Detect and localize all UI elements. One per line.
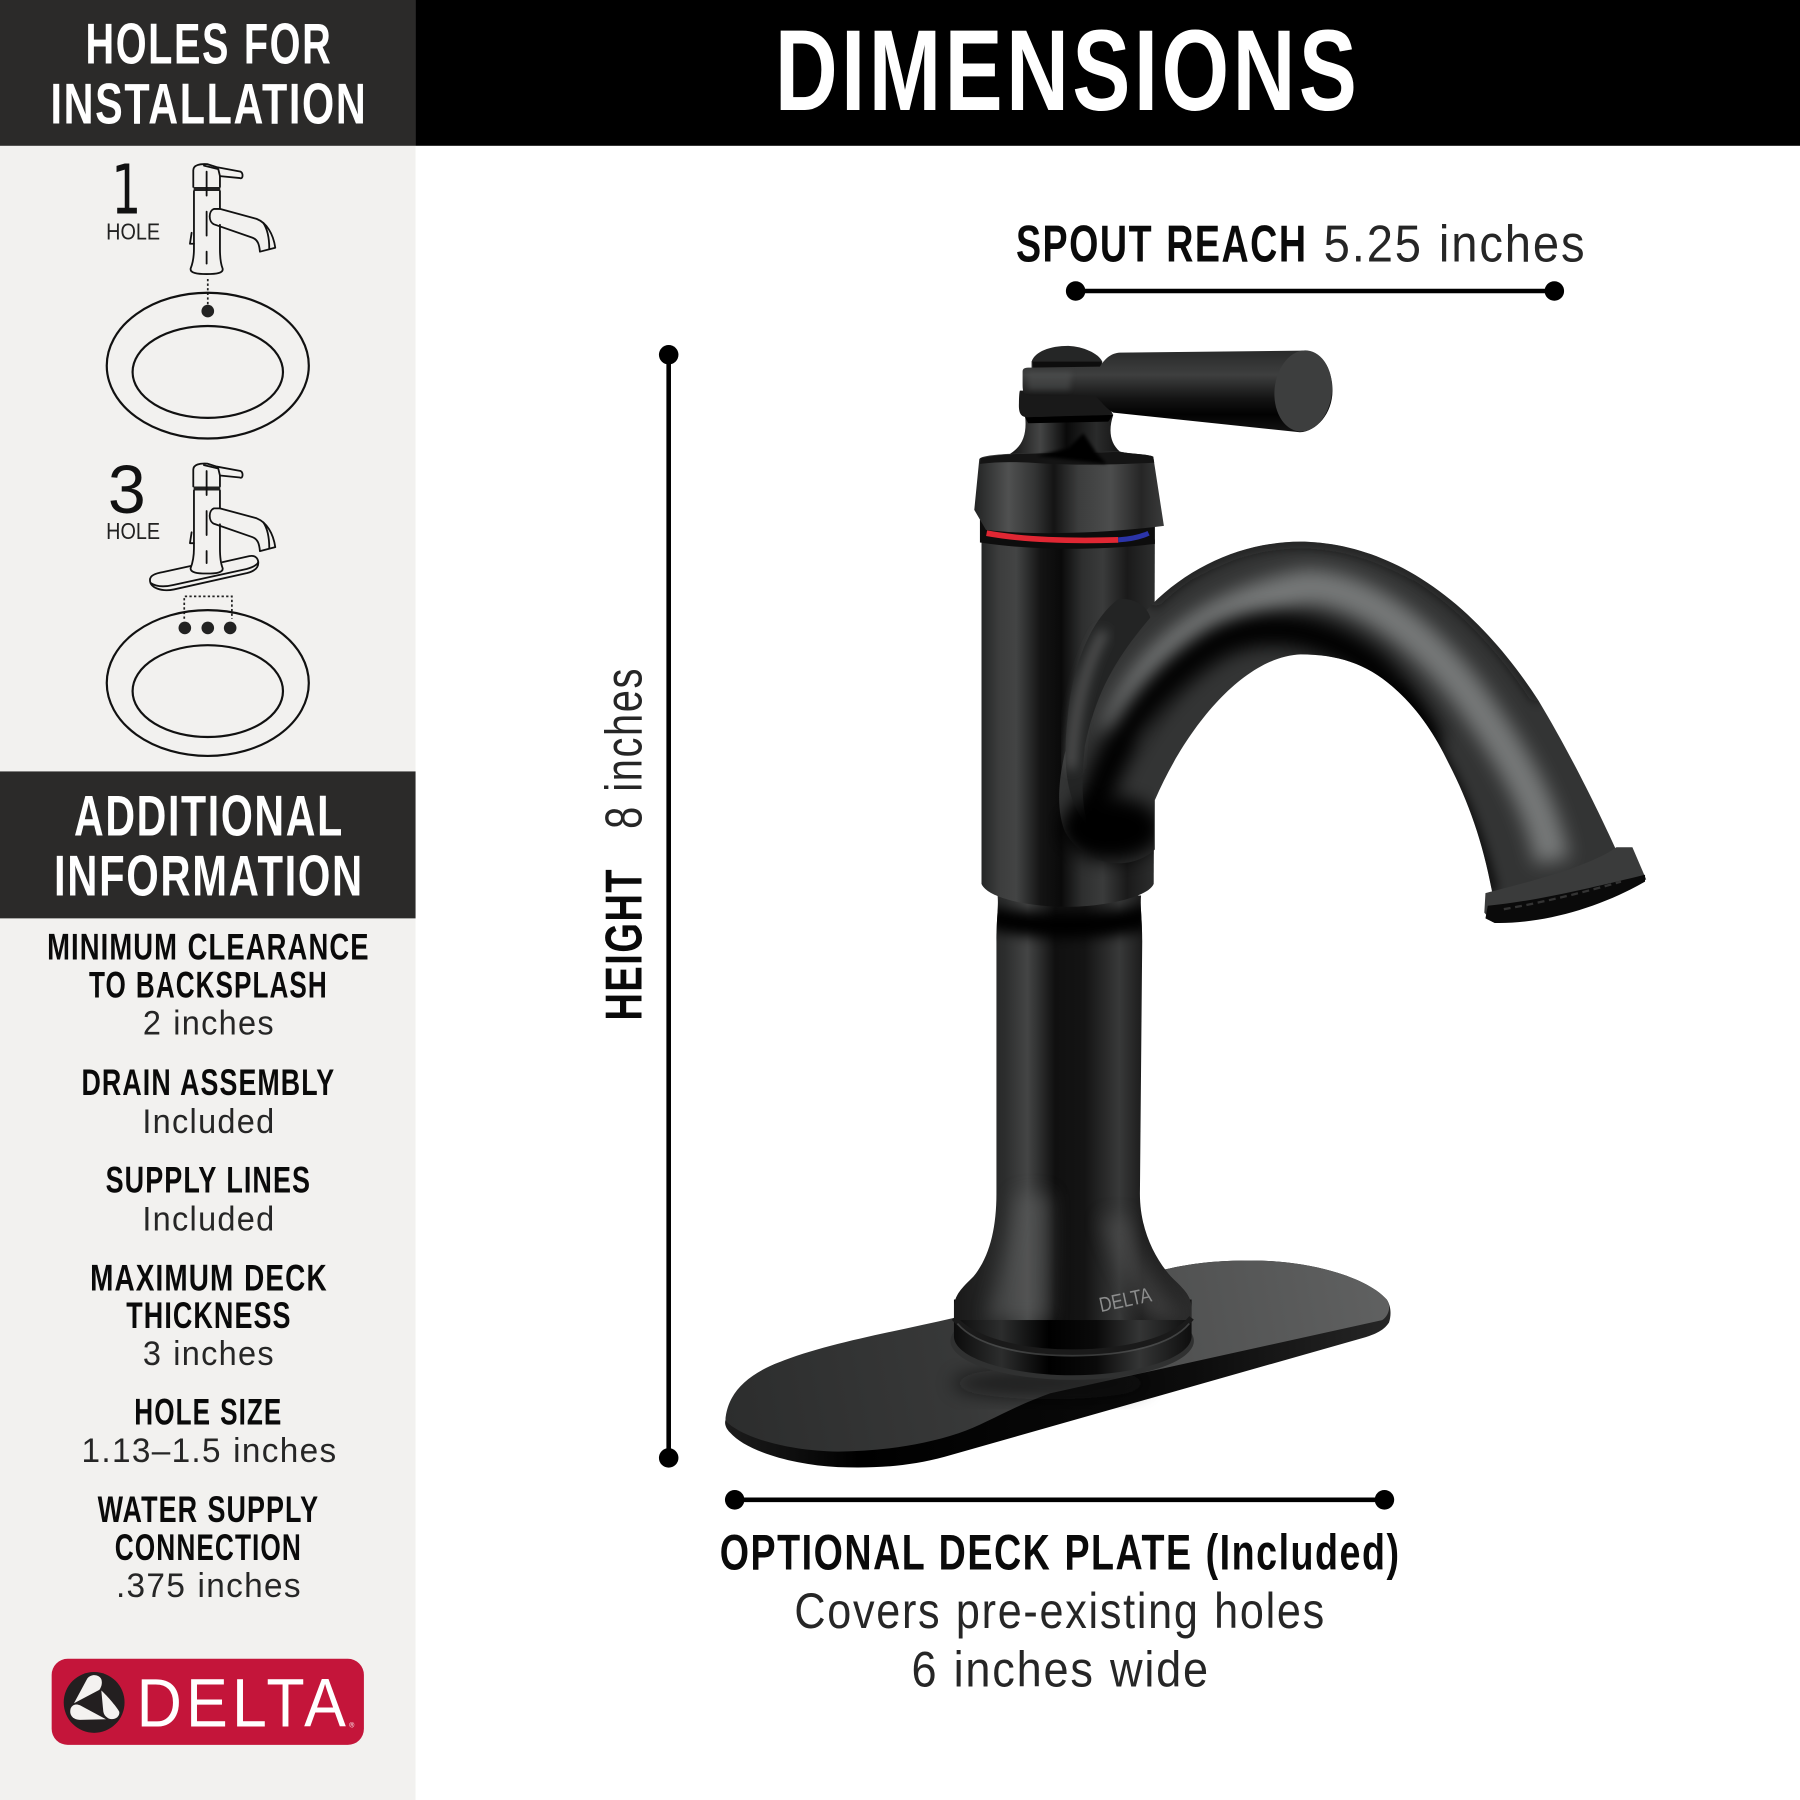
logo: Delta: DELTA xyxy=(137,1665,350,1742)
spec: supply lines: Included xyxy=(142,1201,276,1239)
dimension: height: 8 inches xyxy=(595,667,653,829)
label: 1 hole: HOLE xyxy=(106,218,160,244)
label: 3 hole xyxy=(106,451,160,544)
base ring xyxy=(951,1299,1194,1380)
neck xyxy=(982,415,1153,460)
spec: drain assembly: Included xyxy=(142,1103,276,1141)
handle assembly xyxy=(974,346,1336,549)
hot and cold ring xyxy=(987,533,1149,540)
valve cap xyxy=(974,452,1164,533)
dimension: optional deck plate: 6 inches wide xyxy=(911,1640,1210,1697)
spec: minimum clearance: 2 inches xyxy=(143,1004,275,1042)
spec: minimum clearance xyxy=(47,927,370,1042)
logo: Delta: ® xyxy=(349,1722,354,1730)
dotted bracket lines xyxy=(184,596,232,619)
dimension: height: HEIGHT xyxy=(595,868,653,1021)
lever xyxy=(1023,351,1333,432)
heading: holes for installation: INSTALLATION xyxy=(51,72,367,136)
spec: maximum deck thickness: MAXIMUM DECK xyxy=(90,1257,328,1298)
spout tip flange xyxy=(1484,847,1646,923)
label: 1 hole xyxy=(106,151,160,244)
logo: Delta xyxy=(52,1659,364,1745)
dimension: spout reach xyxy=(1016,215,1586,301)
icon: single-hole faucet xyxy=(190,164,275,274)
label: 3 hole: HOLE xyxy=(106,518,160,544)
spec: maximum deck thickness: 3 inches xyxy=(143,1335,275,1373)
spout root highlight xyxy=(1066,599,1150,827)
spec: maximum deck thickness: THICKNESS xyxy=(126,1295,292,1336)
spec: hole size xyxy=(82,1392,338,1470)
dimension: optional deck plate: Covers pre-existing holes xyxy=(794,1582,1326,1639)
heading: holes for installation xyxy=(0,0,416,146)
heading: additional information: INFORMATION xyxy=(54,844,364,908)
spec: hole size: 1.13–1.5 inches xyxy=(82,1432,338,1470)
dimension: spout reach: 5.25 inches xyxy=(1324,215,1586,273)
spec: water supply connection: WATER SUPPLY xyxy=(98,1489,319,1530)
dimension: optional deck plate xyxy=(720,1490,1401,1697)
heading: additional information: ADDITIONAL xyxy=(74,785,344,849)
spec: water supply connection: .375 inches xyxy=(116,1567,302,1605)
spec: water supply connection xyxy=(98,1489,319,1605)
icon: faucet with deck plate xyxy=(150,463,275,590)
faucet body xyxy=(982,540,1155,907)
spout xyxy=(1059,542,1619,893)
dimension: height xyxy=(595,345,678,1468)
spec: minimum clearance: TO BACKSPLASH xyxy=(89,965,328,1006)
title bar xyxy=(416,0,1800,146)
spec: maximum deck thickness xyxy=(90,1257,328,1373)
spec: hole size: HOLE SIZE xyxy=(134,1392,282,1433)
spec: supply lines xyxy=(106,1160,311,1239)
sink basin xyxy=(107,293,309,439)
dimension: optional deck plate: OPTIONAL DECK PLATE (Included) xyxy=(720,1523,1401,1580)
stem and flare xyxy=(947,895,1200,1322)
spec: water supply connection: CONNECTION xyxy=(115,1527,302,1568)
one hole diagram xyxy=(106,151,309,439)
logo triangle mark xyxy=(70,1675,119,1720)
illustration: black faucet xyxy=(725,346,1646,1467)
lever end cap xyxy=(1270,347,1336,434)
label: 1 hole: 1 xyxy=(111,151,141,231)
logo mark on base: DELTA xyxy=(1097,1283,1154,1317)
dotted drop line xyxy=(207,279,209,304)
spec: drain assembly: DRAIN ASSEMBLY xyxy=(82,1062,335,1103)
title bar: DIMENSIONS xyxy=(775,7,1360,135)
label: 3 hole: 3 xyxy=(108,451,146,528)
heading: additional information xyxy=(0,771,416,918)
three hole diagram xyxy=(106,451,309,756)
left sidebar panel xyxy=(0,0,416,1800)
sink basin with three holes xyxy=(107,610,309,756)
flare lower lip xyxy=(954,1318,1192,1352)
spec: drain assembly xyxy=(82,1062,335,1141)
dark band under valve cap xyxy=(980,517,1155,549)
spec: supply lines: SUPPLY LINES xyxy=(106,1160,311,1201)
heading: holes for installation: HOLES FOR xyxy=(86,13,332,77)
dimension: spout reach: SPOUT REACH xyxy=(1016,215,1308,273)
spec: minimum clearance: MINIMUM CLEARANCE xyxy=(47,927,370,968)
deck plate xyxy=(725,1260,1391,1467)
knob xyxy=(1032,346,1102,368)
ring xyxy=(1019,391,1113,417)
shadow where spout meets body xyxy=(1061,797,1162,861)
